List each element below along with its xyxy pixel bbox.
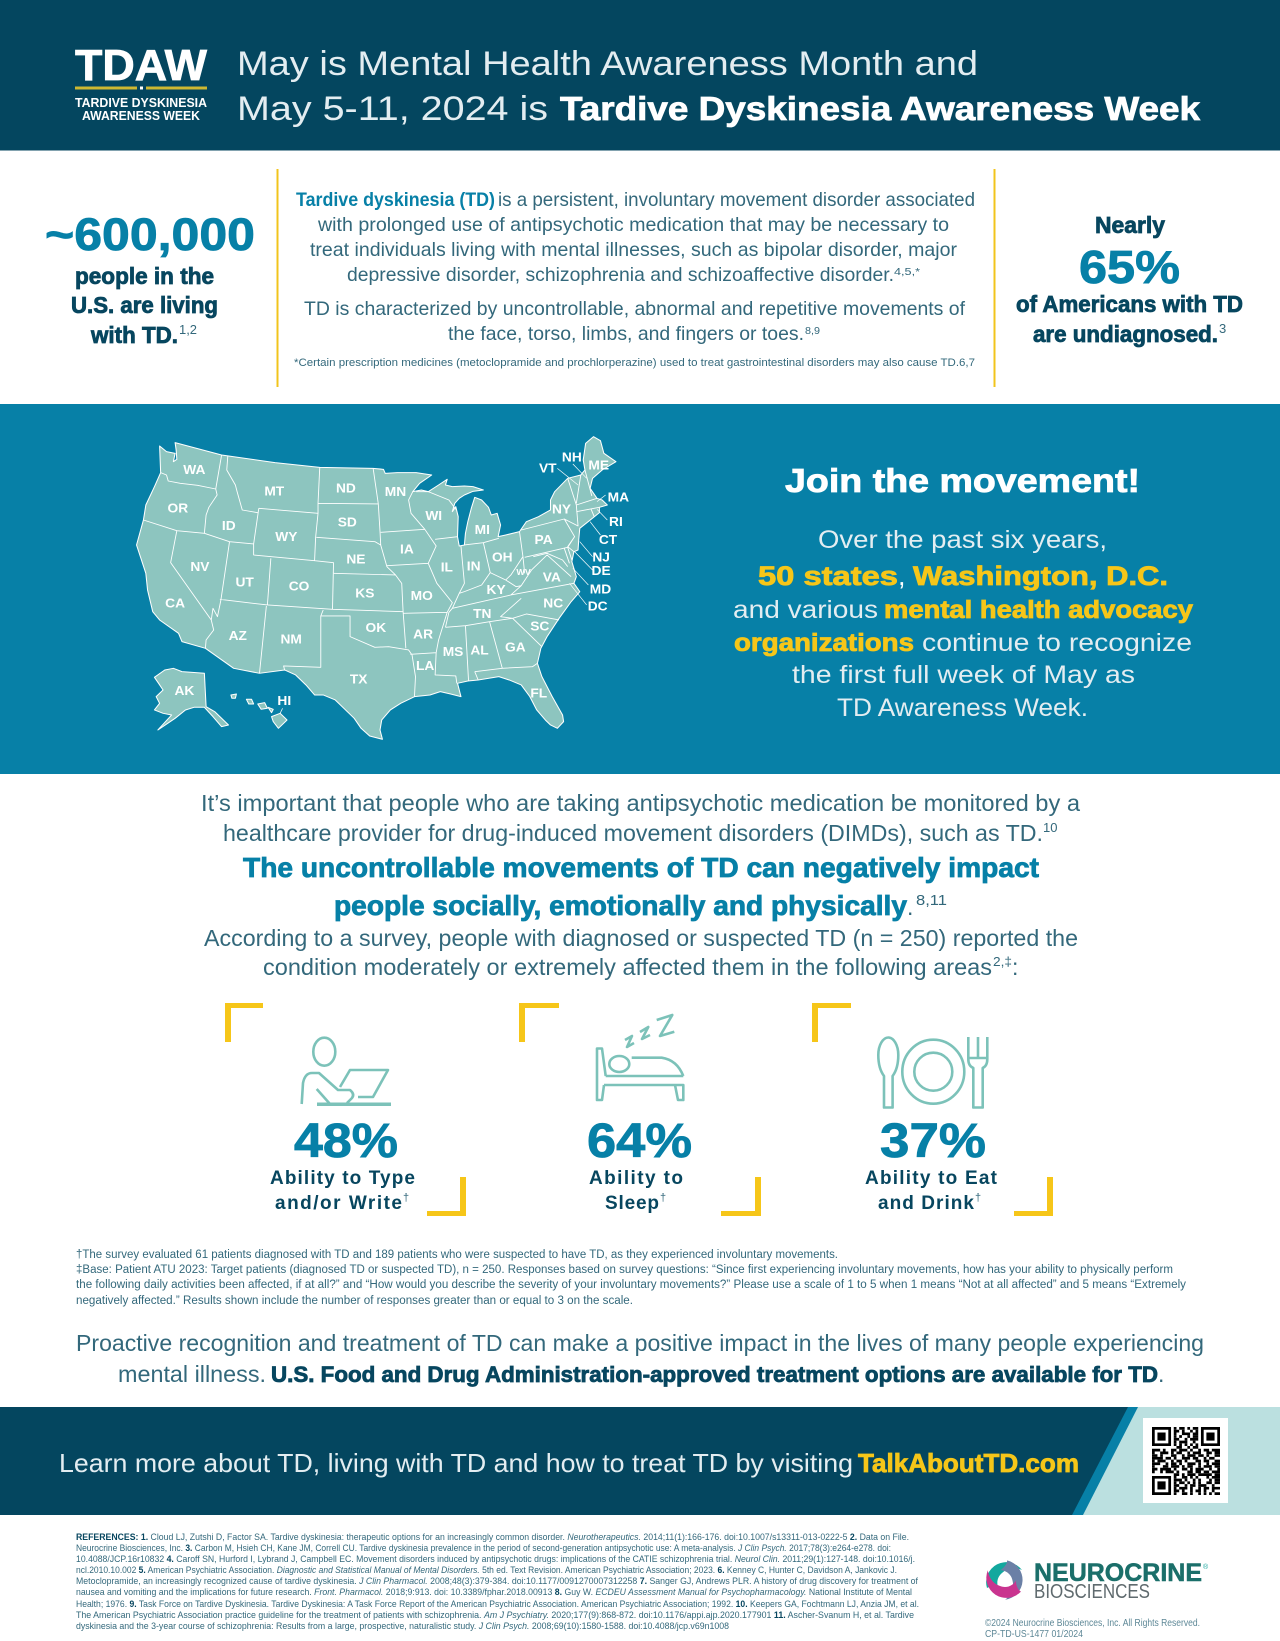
proactive treatment statement: mental illness. [118, 1361, 266, 1387]
state labels: VT [539, 461, 557, 476]
definition text block: treat individuals living with mental illnesses, such as bipolar disorder, major [310, 239, 958, 261]
header title: May 5-11, 2024 is [237, 90, 548, 128]
bracket top left [519, 1003, 559, 1042]
state labels: AK [174, 683, 195, 698]
label: ability to eat and drink: and Drink [878, 1193, 974, 1214]
state labels: HI [277, 693, 291, 708]
copyright [985, 1617, 1200, 1640]
state labels: SC [530, 619, 550, 634]
label: ability to type or write: Ability to Type [270, 1168, 415, 1189]
state labels: NY [552, 502, 571, 516]
state labels: NC [543, 596, 563, 610]
header title: May is Mental Health Awareness Month and [237, 45, 978, 83]
state labels: IA [400, 542, 414, 556]
state labels: WI [425, 508, 442, 523]
definition text block: depressive disorder, schizophrenia and schizoaffective disorder. [347, 264, 894, 286]
survey intro text: condition moderately or extremely affected them in the following areas [263, 954, 992, 980]
state labels: MO [411, 588, 433, 603]
stat: 65% undiagnosed [1016, 212, 1243, 347]
state labels: CO [289, 579, 309, 594]
state labels [165, 450, 629, 708]
join the movement text: organizations [734, 629, 914, 657]
survey intro text: 2,‡ [993, 954, 1012, 969]
state labels: WY [275, 529, 297, 544]
state labels: ID [222, 518, 236, 533]
monitoring intro text: It’s important that people who are taking antipsychotic medication be monitored by a [201, 790, 1080, 816]
state labels: TX [350, 672, 367, 686]
state labels: UT [235, 575, 255, 590]
definition text block [294, 189, 975, 369]
label: ability to sleep: Sleep [605, 1193, 659, 1214]
icon: spoon plate and fork [878, 1037, 987, 1108]
Neurocrine Biosciences logo: BIOSCIENCES [1034, 1581, 1150, 1603]
state labels: WA [183, 462, 206, 477]
join the movement text: the first full week of May as [792, 661, 1135, 689]
references: 10.4088/JCP.16r10832 4. Caroff SN, Hurford I, Lybrand J, Campbell EC. Movement disorders induced by antipsychotic drugs: implications of the CATIE schizophrenia trial. Neurol Clin. 2011;29(1):127-148. doi:10.1016/j. [76, 1554, 915, 1565]
state labels: AR [413, 627, 433, 641]
state labels: GA [505, 640, 526, 655]
state labels: SD [338, 515, 357, 530]
state labels: OH [492, 550, 513, 565]
leader lines [280, 464, 607, 713]
references: REFERENCES: 1. Cloud LJ, Zutshi D, Factor SA. Tardive dyskinesia: therapeutic options for an increasingly common disorder. Neurotherapeutics. 2014;11(1):166-176. doi:10.1007/s13311-013-0222-5 2. Data on File. [76, 1532, 909, 1543]
Neurocrine Biosciences logo: NEUROCRINE [1034, 1559, 1202, 1587]
impact heading: . [907, 894, 913, 920]
QR code [1143, 1418, 1228, 1503]
join the movement text: 50 states [758, 561, 898, 591]
impact heading: The uncontrollable movements of TD can negatively impact [243, 852, 1039, 883]
proactive treatment statement: U.S. Food and Drug Administration-approved treatment options are available for TD [271, 1362, 1158, 1387]
TDAW logo [75, 41, 208, 123]
stat: 37%: 37% [880, 1115, 986, 1168]
monitoring intro text: 10 [1043, 820, 1057, 835]
state labels: MA [608, 490, 629, 505]
state labels: NJ [592, 550, 610, 565]
TDAW logo: AWARENESS WEEK [82, 108, 201, 123]
join the movement text: mental health advocacy [884, 596, 1193, 624]
bracket top left [812, 1003, 851, 1042]
state labels: OR [168, 501, 188, 516]
state labels: MD [590, 582, 611, 596]
state labels: AZ [229, 628, 247, 643]
survey intro text: : [1012, 954, 1018, 980]
definition text block: TD is characterized by uncontrollable, abnormal and repetitive movements of [304, 298, 966, 320]
state labels: NV [190, 559, 209, 574]
stat: 48%: 48% [294, 1115, 398, 1168]
survey intro text: According to a survey, people with diagnosed or suspected TD (n = 250) reported the [204, 925, 1078, 951]
Neurocrine Biosciences logo: ® [1203, 1563, 1209, 1571]
state labels: NE [346, 552, 365, 566]
stat: 600,000 people: with TD. [90, 322, 178, 348]
icon: person sleeping in bed [597, 1015, 683, 1100]
stat: 65% undiagnosed: Nearly [1095, 212, 1165, 238]
state labels: MT [264, 484, 285, 498]
TDAW logo: TDAW [75, 41, 207, 90]
state labels: NM [280, 632, 302, 646]
label: ability to eat and drink [865, 1168, 998, 1214]
panel: join the movement [0, 404, 1280, 774]
divider left [276, 169, 278, 387]
stat: 600,000 people: 1,2 [179, 322, 197, 337]
state labels: AL [470, 643, 489, 657]
definition text block: is a persistent, involuntary movement disorder associated [498, 189, 975, 211]
join the movement text: and various [733, 596, 878, 624]
state labels: LA [416, 658, 435, 673]
state labels: MN [385, 484, 406, 499]
join the movement text: Join the movement! [785, 462, 1140, 499]
monitoring intro text [201, 790, 1080, 846]
state labels: CA [165, 596, 185, 610]
join the movement text: , [898, 561, 906, 591]
call to action text: Learn more about TD, living with TD and how to treat TD by visiting [59, 1448, 853, 1478]
bracket bottom right [721, 1177, 761, 1216]
header title: Tardive Dyskinesia Awareness Week [560, 90, 1201, 127]
stat: 600,000 people [45, 209, 255, 348]
US map [137, 437, 629, 739]
survey footnotes: negatively affected.” Results shown include the number of responses greater than or equal to 3 on the scale. [76, 1295, 633, 1307]
proactive treatment statement [76, 1330, 1204, 1387]
states [137, 437, 616, 739]
monitoring intro text: healthcare provider for drug-induced movement disorders (DIMDs), such as TD. [223, 820, 1043, 846]
label: ability to type or write [270, 1168, 415, 1214]
label: ability to sleep: † [660, 1192, 666, 1204]
stat: 65% undiagnosed: 65% [1079, 241, 1180, 293]
state labels: MS [443, 644, 463, 659]
definition text block: Tardive dyskinesia (TD) [296, 189, 495, 211]
proactive treatment statement: . [1158, 1361, 1164, 1387]
stat: 600,000 people: U.S. are living [71, 292, 218, 318]
join the movement text: continue to recognize [922, 629, 1192, 657]
stat: 600,000 people: people in the [75, 263, 214, 289]
survey footnotes [76, 1249, 1186, 1307]
impact heading: people socially, emotionally and physically [334, 890, 907, 921]
join the movement text: Over the past six years, [818, 526, 1107, 554]
state labels: IL [441, 560, 453, 575]
copyright: CP-TD-US-1477 01/2024 [985, 1628, 1083, 1640]
survey intro text [204, 925, 1078, 980]
bracket bottom right [1014, 1177, 1053, 1216]
stat: 600,000 people: ~600,000 [45, 209, 255, 260]
header banner [0, 0, 1280, 150]
state labels: VA [543, 570, 561, 585]
references: dyskinesia and the 3-year course of schizophrenia: Results from a large, prospective, naturalistic study. J Clin Psych. 2008;69(10):1580-1588. doi:10.4088/jcp.v69n1008 [76, 1621, 729, 1632]
label: ability to sleep: Ability to [589, 1168, 683, 1189]
state labels: TN [473, 606, 491, 621]
references: Health; 1976. 9. Task Force on Tardive Dyskinesia. Tardive Dyskinesia: A Task Force Report of the American Psychiatric Association. American Psychiatric Association; 1992. 10. Keepers GA, Fochtmann LJ, Anzia JM, et al. [76, 1599, 919, 1610]
state labels: KY [487, 582, 506, 597]
definition text block: 8,9 [805, 326, 820, 337]
Neurocrine Biosciences logo [981, 1559, 1209, 1605]
icon: person at laptop [302, 1038, 391, 1104]
definition text block: the face, torso, limbs, and fingers or toes. [448, 323, 804, 345]
state labels: WV [516, 567, 531, 577]
references: Metoclopramide, an increasingly recognized cause of tardive dyskinesia. J Clin Pharmacol. 2008;48(3):379-384. doi:10.1177/0091270007312258 7. Sanger GJ, Andrews PLR. A history of drug discovery for treatment of [76, 1576, 918, 1587]
definition text block: 4,5,* [894, 267, 920, 278]
state labels: FL [530, 686, 547, 700]
references: Neurocrine Biosciences, Inc. 3. Carbon M, Hsieh CH, Kane JM, Correll CU. Tardive dyskinesia prevalence in the period of second-generation antipsychotic use: A meta-analysis. J Clin Psych. 2017;78(3):e264-e278. doi: [76, 1543, 891, 1554]
bracket top left [225, 1003, 263, 1042]
state labels: OK [366, 620, 386, 635]
join the movement text: TD Awareness Week. [837, 694, 1088, 722]
label: ability to sleep [589, 1168, 683, 1214]
panel: sleep [519, 1003, 761, 1216]
stat: 65% undiagnosed: 3 [1219, 321, 1226, 336]
label: ability to eat and drink: Ability to Eat [865, 1168, 998, 1189]
stat: 65% undiagnosed: are undiagnosed. [1033, 321, 1218, 347]
state labels: ND [336, 481, 356, 496]
divider right [994, 169, 996, 387]
join the movement text: Washington, D.C. [913, 561, 1168, 591]
call to action text: TalkAboutTD.com [858, 1448, 1079, 1478]
impact heading [243, 852, 1039, 921]
state labels: IN [467, 559, 481, 574]
TDAW logo: TARDIVE DYSKINESIA [75, 95, 208, 110]
state labels: KS [355, 586, 374, 601]
join the movement text [733, 462, 1193, 722]
copyright: ©2024 Neurocrine Biosciences, Inc. All Rights Reserved. [985, 1617, 1200, 1629]
survey footnotes: †The survey evaluated 61 patients diagnosed with TD and 189 patients who were suspected to have TD, as they experienced involuntary movements. [76, 1249, 838, 1261]
definition footnote: *Certain prescription medicines (metoclopramide and prochlorperazine) used to treat gastrointestinal disorders may also cause TD.6,7 [294, 357, 975, 369]
state labels: CT [599, 532, 618, 547]
panel: type or write [225, 1003, 466, 1216]
state labels: DE [592, 563, 611, 578]
label: ability to type or write: † [403, 1192, 409, 1204]
stat: 64%: 64% [587, 1115, 692, 1168]
state labels: ME [588, 458, 609, 472]
call to action banner [0, 1407, 1280, 1515]
label: ability to type or write: and/or Write [275, 1193, 402, 1214]
icon: swirl mark [981, 1559, 1030, 1605]
references: The American Psychiatric Association practice guideline for the treatment of patients with schizophrenia. Am J Psychiatry. 2020;177(9):868-872. doi:10.1176/appi.ajp.2020.177901 11. Ascher-Svanum H, et al. Tardive [76, 1610, 914, 1621]
panel: eat and drink [812, 1003, 1053, 1216]
references: ncl.2010.10.002 5. American Psychiatric Association. Diagnostic and Statistical Manual of Mental Disorders. 5th ed. Text Revision. American Psychiatric Association; 2023. 6. Kenney C, Hunter C, Davidson A, Jankovic J. [76, 1565, 897, 1576]
references: nausea and vomiting and the implications for future research. Front. Pharmacol. 2018;9:913. doi: 10.3389/fphar.2018.00913 8. Guy W. ECDEU Assessment Manual for Psychopharmacology. National Institute of Mental [76, 1587, 912, 1598]
survey footnotes: ‡Base: Patient ATU 2023: Target patients (diagnosed TD or suspected TD), n = 250. Responses based on survey questions: “Since first experiencing involuntary movements, how has your ability to physically perform [76, 1264, 1173, 1276]
header title [237, 45, 1201, 128]
impact heading: 8,11 [916, 892, 947, 909]
label: ability to eat and drink: † [975, 1192, 981, 1204]
proactive treatment statement: Proactive recognition and treatment of TD can make a positive impact in the lives of many people experiencing [76, 1330, 1204, 1356]
references [76, 1532, 919, 1632]
state labels: RI [609, 514, 623, 529]
state labels: PA [535, 532, 553, 547]
definition text block: with prolonged use of antipsychotic medication that may be necessary to [317, 214, 949, 236]
stat: 65% undiagnosed: of Americans with TD [1016, 291, 1243, 317]
state labels: NH [562, 450, 582, 465]
state labels: DC [588, 599, 608, 614]
survey footnotes: the following daily activities been affected, if at all?” and “How would you describe the severity of your involuntary movements?” Please use a scale of 1 to 5 when 1 means “Not at all affected” and 5 means “Extremely [76, 1279, 1186, 1291]
bracket bottom right [427, 1177, 466, 1216]
state labels: MI [475, 522, 490, 537]
